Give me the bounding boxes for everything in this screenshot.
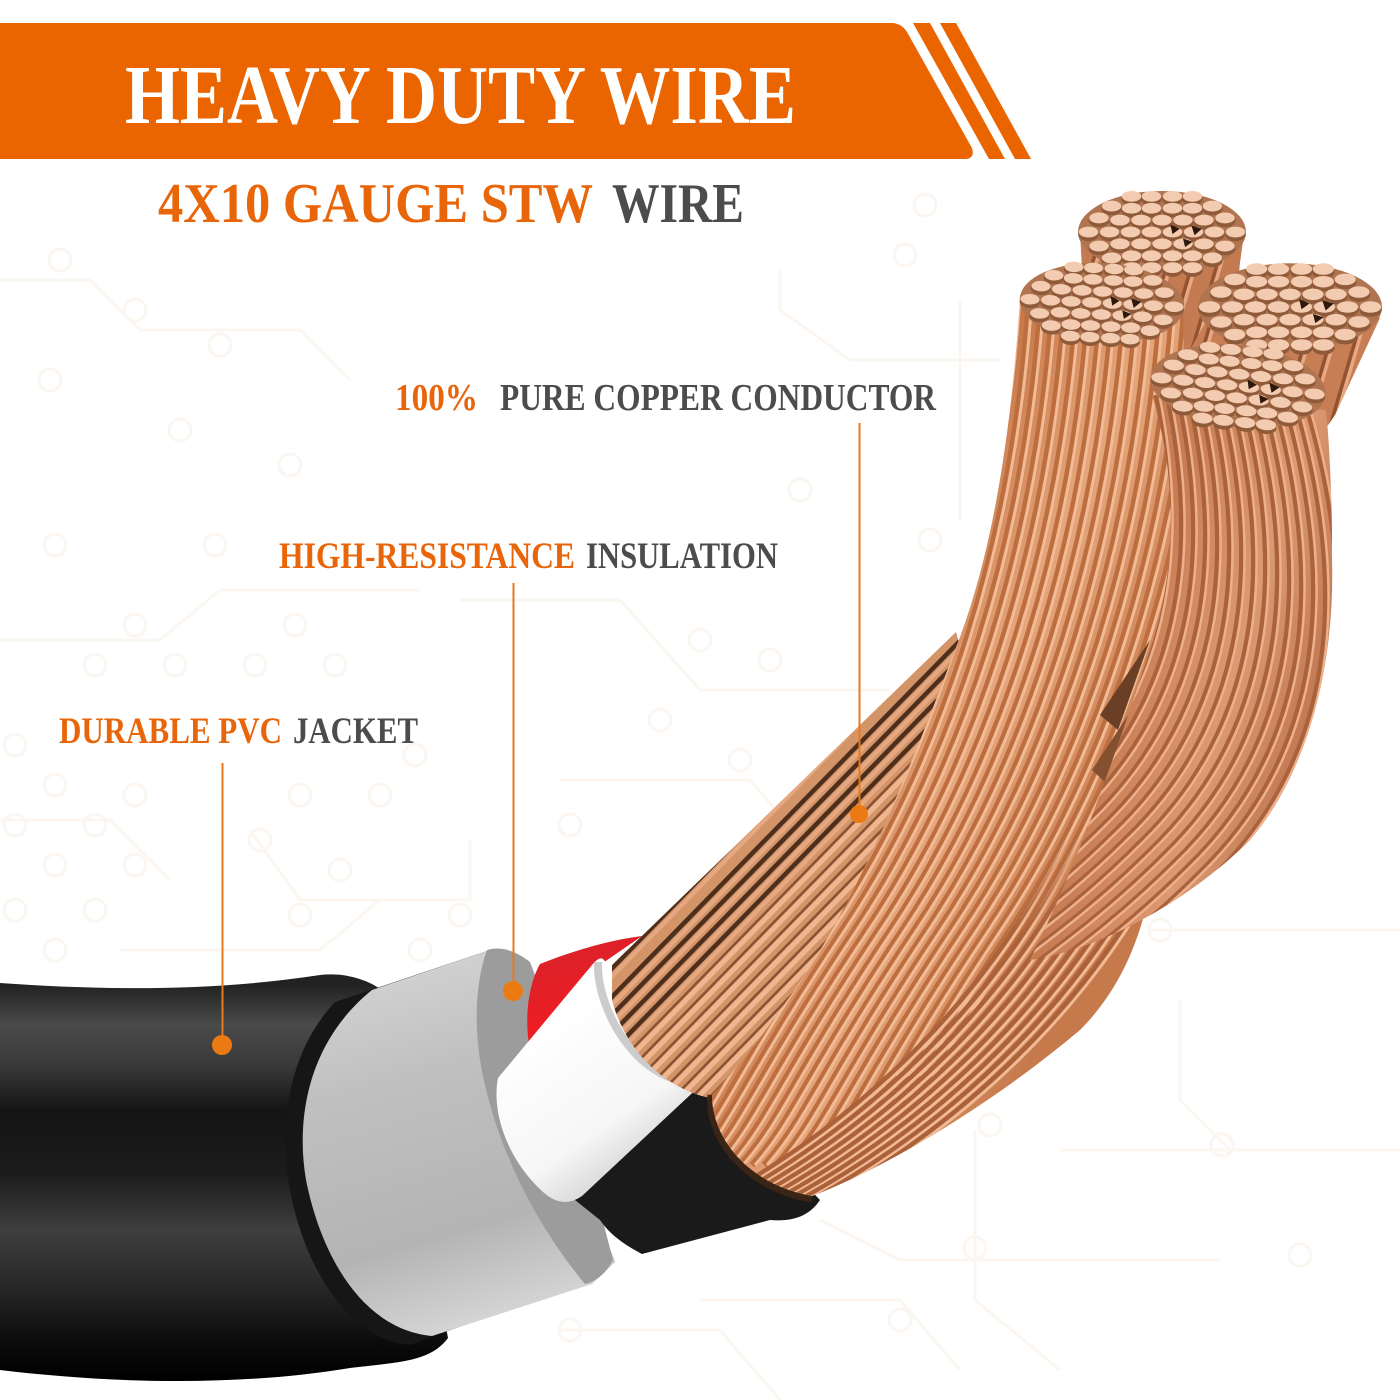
title: HEAVY DUTY WIRE (125, 49, 796, 142)
copper bundle lower left (612, 632, 958, 1098)
callout: jacket: DURABLE PVC (59, 711, 282, 752)
subtitle: 4X10 GAUGE STW (158, 173, 593, 235)
back copper bundle right (1192, 263, 1382, 426)
copper bundle front right (1030, 342, 1332, 960)
callout: copper conductor (395, 377, 936, 823)
red conductor insulation (527, 936, 642, 1050)
callout: copper conductor: PURE COPPER CONDUCTOR (500, 377, 936, 419)
callout: jacket (59, 711, 418, 1055)
grey inner sleeve (286, 948, 615, 1345)
title banner (0, 23, 1031, 159)
callout: insulation: INSULATION (586, 536, 778, 577)
callout: insulation: HIGH-RESISTANCE (279, 536, 575, 577)
black conductor insulation (570, 1075, 820, 1254)
callout: jacket: JACKET (293, 711, 418, 752)
black outer jacket (0, 974, 448, 1381)
callout: copper conductor: 100% (395, 377, 478, 419)
back copper bundle top (1078, 191, 1246, 350)
copper bundle front main (707, 262, 1184, 1202)
subtitle: WIRE (612, 173, 744, 235)
dark slits between bundles (1092, 640, 1150, 785)
callout: insulation (279, 536, 778, 1001)
white conductor insulation (496, 958, 704, 1202)
